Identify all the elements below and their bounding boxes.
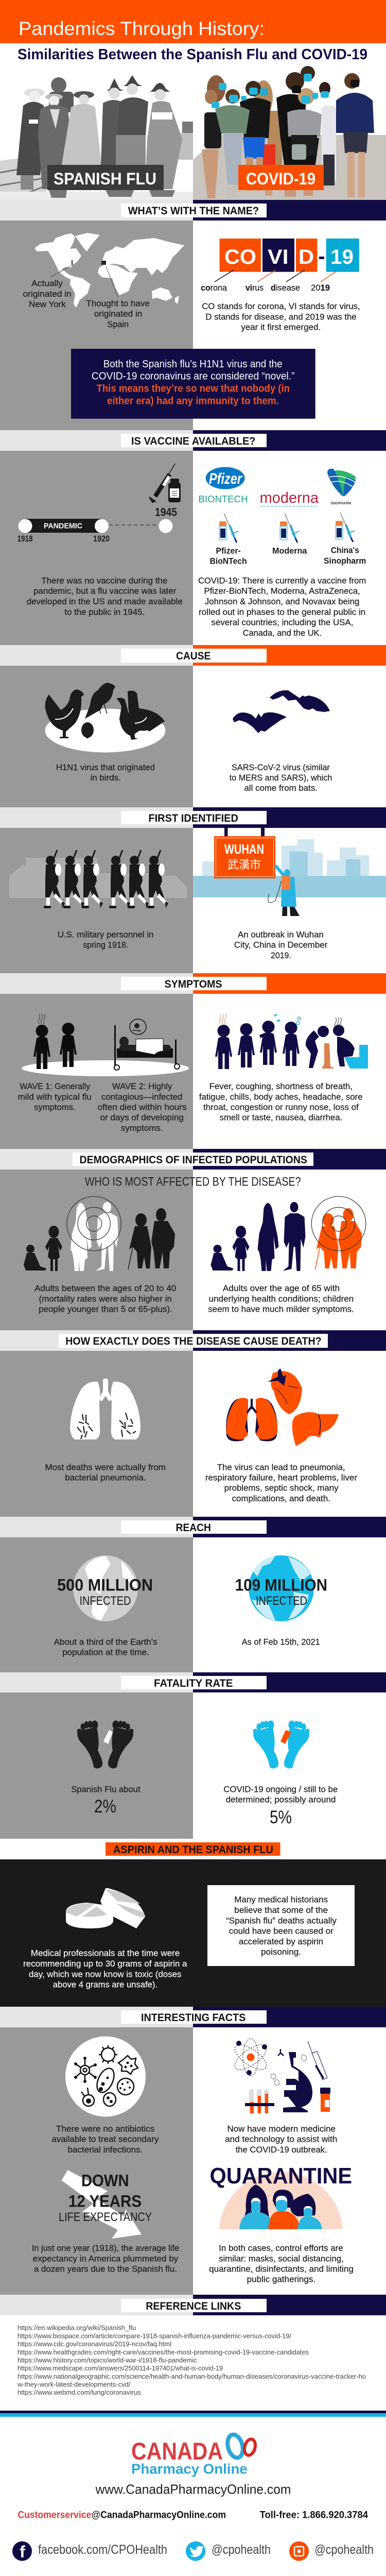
reference list xyxy=(17,2324,366,2396)
callout: aspirin poisoning: accelerated by aspirin xyxy=(239,1937,323,1946)
map captions: Actually xyxy=(31,279,63,289)
vaccine names xyxy=(210,545,366,566)
text: control efforts: quarantine, disinfectants, and limiting xyxy=(209,2264,354,2274)
text: current vaccines: Johnson & Johnson, and Novavax being xyxy=(205,597,359,606)
text: COVID symptoms: fatigue, chills, body aches, headache, sore xyxy=(199,1092,362,1101)
text: wave 2: WAVE 2: Highly xyxy=(112,1081,172,1091)
silhouettes: COVID age groups xyxy=(211,1196,366,1271)
social: facebook: f xyxy=(20,2543,25,2561)
text: Wuhan outbreak: 2019. xyxy=(271,951,291,960)
timeline: PANDEMIC xyxy=(44,522,82,531)
stat: 109 million infected xyxy=(235,1576,327,1608)
icon: vaccine vial Pfizer xyxy=(219,513,238,543)
callout: aspirin poisoning xyxy=(207,1885,355,1966)
text: current vaccines: Canada, and the UK. xyxy=(243,628,322,638)
title: Pandemics Through History: xyxy=(19,18,265,39)
icon: lungs, heart and liver xyxy=(226,1368,339,1446)
text: Wuhan outbreak: An outbreak in Wuhan xyxy=(238,929,324,939)
text: wave 1: WAVE 1: Generally xyxy=(20,1081,91,1091)
logo: Canada Pharmacy Online xyxy=(131,2433,257,2477)
contact email: Customerservice@CanadaPharmacyOnline.com xyxy=(17,2510,226,2520)
timeline: 1920 xyxy=(93,534,110,544)
text: medical professionals aspirin: above 4 grams are unsafe). xyxy=(53,1980,157,1990)
stat: 500 million infected: 500 MILLION xyxy=(57,1576,153,1595)
callout: aspirin poisoning: poisoning. xyxy=(261,1947,301,1957)
COVID acronym explanation xyxy=(202,301,360,332)
heading: How exactly xyxy=(0,1330,386,1351)
heading: Interesting facts xyxy=(0,2007,386,2027)
heading: Symptoms: SYMPTOMS xyxy=(165,978,222,990)
text: life expectancy: In just one year (1918), the average life xyxy=(32,2243,179,2253)
callout: novel viruses: either era) had any immunity to them. xyxy=(107,395,279,406)
heading: Cause: CAUSE xyxy=(176,650,210,662)
icon: lungs with bacteria xyxy=(70,1379,141,1439)
logo: Canada Pharmacy Online: CANADA xyxy=(131,2437,223,2465)
website: www.CanadaPharmacyOnline.com xyxy=(95,2482,291,2497)
sign: Wuhan: 武漢市 xyxy=(227,858,261,871)
text: H1N1 birds: in birds. xyxy=(91,773,121,783)
text: no vaccine during pandemic: There was no vaccine during the xyxy=(41,575,167,585)
vaccine names: Sinopharm xyxy=(324,556,366,566)
stat: down 12 years life expectancy xyxy=(59,2171,152,2224)
vaccine names: Pfizer- xyxy=(216,546,241,555)
COVID-19 letter blocks: CO xyxy=(224,246,256,268)
vaccine names: China's xyxy=(331,545,359,555)
text: control efforts: similar: masks, social distancing, xyxy=(219,2253,344,2263)
reference list: https://www.history.com/topics/world-war-i/1918-flu-pandemic xyxy=(17,2356,197,2364)
text: wave 1: symptoms. xyxy=(34,1102,76,1112)
social: instagram: @cpohealth xyxy=(314,2543,374,2557)
text: no vaccine during pandemic xyxy=(27,575,183,617)
logo: Sinopharm: SINOPHARM xyxy=(330,502,351,505)
text: no vaccine during pandemic: to the public in 1945. xyxy=(64,607,145,617)
text: bacterial pneumonia: Most deaths were actually from xyxy=(45,1462,166,1472)
map captions xyxy=(23,279,150,329)
logo: Pfizer BioNTech: BIONTECH xyxy=(199,494,248,504)
label: COVID-19: COVID-19 xyxy=(246,170,315,188)
timeline xyxy=(17,506,177,544)
text: US military: spring 1918. xyxy=(83,940,128,950)
text: current vaccines: rolled out in phases to the general public in xyxy=(199,607,365,617)
map captions: New York xyxy=(29,299,66,309)
text: third of the population xyxy=(54,1637,157,1657)
stat: 109 million infected: INFECTED xyxy=(256,1594,307,1608)
text: no antibiotics: There were no antibiotics xyxy=(56,2124,154,2133)
sign: Wuhan: WUHAN xyxy=(224,841,264,857)
social: facebook: facebook.com/CPOHealth xyxy=(38,2543,167,2557)
text: medical professionals aspirin: Medical professionals at the time were xyxy=(31,1948,180,1958)
panel: aspirin xyxy=(0,1859,386,2007)
map captions: originated in xyxy=(94,309,142,319)
heading: Reach: REACH xyxy=(176,1522,211,1534)
text: SARS-CoV-2 bats: all come from bats. xyxy=(244,783,318,793)
illustration: COVID symptoms figures xyxy=(215,1014,368,1069)
text: H1N1 birds: H1N1 virus that originated xyxy=(56,762,155,772)
text: COVID complications: The virus can lead to pneumonia, xyxy=(217,1462,345,1472)
text: 5 percent: COVID-19 ongoing / still to be xyxy=(223,1784,338,1794)
callout: novel viruses: COVID-19 coronavirus are considered “novel.” xyxy=(92,371,294,382)
world map xyxy=(34,233,184,308)
text: SARS-CoV-2 bats: to MERS and SARS), which xyxy=(230,773,332,783)
timeline: 1918 xyxy=(17,534,33,544)
illustration: town silhouette xyxy=(9,858,187,898)
heading: Fatality rate: FATALITY RATE xyxy=(154,1677,233,1689)
text: 2 percent: 2% xyxy=(94,1797,116,1817)
silhouettes: 1918 age groups xyxy=(24,1196,175,1271)
text: wave 1 xyxy=(17,1081,92,1112)
text: life expectancy: expectancy in America plummeted by xyxy=(33,2253,179,2263)
logo: Moderna: moderna xyxy=(260,489,319,506)
stat: down 12 years life expectancy: LIFE EXPECTANCY xyxy=(59,2210,152,2224)
icon: cyan globe xyxy=(249,1555,314,1621)
heading: What's with the name: WHAT’S WITH THE NAME? xyxy=(128,205,259,217)
text: 5 percent: determined; possibly around xyxy=(226,1795,336,1805)
map markers and leader lines xyxy=(50,260,118,298)
text: adults over 65: underlying health conditions; children xyxy=(209,1294,354,1303)
icon: downward arrow xyxy=(62,2170,142,2239)
text: life expectancy xyxy=(32,2243,179,2274)
text: no vaccine during pandemic: pandemic, but a flu vaccine was later xyxy=(33,586,177,596)
callout: aspirin poisoning: Many medical historians xyxy=(234,1895,328,1905)
text: control efforts: public gatherings. xyxy=(247,2275,315,2284)
illustration: marching soldiers xyxy=(44,850,168,908)
text: control efforts: In both cases, control efforts are xyxy=(219,2243,343,2253)
subtitle: Similarities Between the Spanish Flu and COVID-19 xyxy=(17,46,367,63)
text: 2 percent: Spanish Flu about xyxy=(71,1784,141,1794)
text: wave 2: or days of developing xyxy=(100,1113,184,1123)
text: wave 2 xyxy=(97,1081,186,1133)
text: SARS-CoV-2 bats: SARS-CoV-2 virus (similar xyxy=(232,762,330,772)
reference list: https://www.biospace.com/article/compare-1918-spanish-influenza-pandemic-versus-covid-19/ xyxy=(17,2332,291,2340)
text: 2 percent xyxy=(71,1784,141,1817)
heading: Aspirin: ASPIRIN AND THE SPANISH FLU xyxy=(113,1844,273,1856)
COVID acronym explanation: year it first emerged. xyxy=(241,323,321,332)
heading: Reach xyxy=(0,1517,386,1537)
sign: Wuhan xyxy=(214,828,275,878)
text: current vaccines: COVID-19: There is currently a vaccine from xyxy=(198,575,366,585)
icon: bats xyxy=(233,690,330,733)
acronym words xyxy=(201,283,330,293)
text: COVID complications: complications, and death. xyxy=(232,1494,330,1503)
acronym words: 2019 xyxy=(311,283,330,293)
social: facebook xyxy=(12,2541,167,2561)
icon: grey globe xyxy=(73,1555,138,1621)
map captions: Spain xyxy=(107,319,129,329)
vaccine names: Moderna xyxy=(272,546,307,555)
text: modern medicine: the COVID-19 outbreak. xyxy=(236,2145,327,2155)
text: third of the population: About a third of the Earth’s xyxy=(54,1637,157,1647)
icon: feet with toe tag xyxy=(77,1721,134,1769)
timeline: 1945 xyxy=(155,506,177,519)
stat: down 12 years life expectancy: DOWN xyxy=(81,2171,129,2190)
acronym words: corona xyxy=(201,283,227,293)
logo: Pfizer BioNTech: Pfizer xyxy=(209,470,243,487)
heading: Is vaccine available: IS VACCINE AVAILABLE? xyxy=(131,435,255,447)
text: wave 2: often died within hours xyxy=(97,1102,186,1112)
acronym words: virus xyxy=(245,283,264,293)
reference list: w-they-work-latest-developments-cvd/ xyxy=(17,2380,131,2388)
text: adults 20 to 40: (mortality rates were also higher in xyxy=(39,1294,172,1303)
text: wave 1: mild with typical flu xyxy=(17,1092,92,1101)
heading: First identified: FIRST IDENTIFIED xyxy=(148,812,238,824)
contact phone: Toll-free: 1.866.920.3784 xyxy=(260,2510,368,2520)
stat: 500 million infected: INFECTED xyxy=(79,1594,131,1608)
label: Spanish flu: SPANISH FLU xyxy=(54,170,156,188)
stat: 109 million infected: 109 MILLION xyxy=(235,1576,327,1595)
text: COVID symptoms: throat, congestion or runny nose, loss of xyxy=(203,1102,359,1112)
logo: Pfizer BioNTech xyxy=(199,467,248,504)
text: 5 percent xyxy=(223,1784,338,1827)
COVID-19 letter blocks xyxy=(215,239,359,282)
heading: Is vaccine available xyxy=(0,430,386,451)
social: twitter: @cpohealth xyxy=(212,2543,271,2557)
text: COVID symptoms: Fever, coughing, shortness of breath, xyxy=(209,1081,353,1091)
text: as of date: As of Feb 15th, 2021 xyxy=(242,1637,320,1647)
hero: Spanish flu photo group xyxy=(0,75,193,200)
text: adults over 65 xyxy=(208,1283,354,1314)
text: medical professionals aspirin xyxy=(23,1948,187,1990)
text: adults 20 to 40: Adults between the ages of 20 to 40 xyxy=(34,1283,176,1293)
reference list: https://www.cdc.gov/coronavirus/2019-ncov/faq.html xyxy=(17,2340,171,2348)
icon: aspirin pills xyxy=(66,1888,145,1928)
heading: Demographics xyxy=(0,1149,386,1170)
callout: novel viruses: This means they’re so new that nobody (in xyxy=(97,383,290,395)
COVID acronym explanation: D stands for disease, and 2019 was the xyxy=(205,312,357,321)
COVID-19 letter blocks: VI xyxy=(268,246,288,268)
text: COVID complications: problems, septic shock, many xyxy=(224,1483,339,1493)
text: adults 20 to 40: people younger than 5 or 65-plus). xyxy=(39,1304,172,1314)
text: no antibiotics: bacterial infections. xyxy=(68,2145,143,2155)
text: bacterial pneumonia: bacterial pneumonia. xyxy=(65,1472,146,1482)
text: wave 2: contagious—infected xyxy=(101,1092,182,1101)
heading: How exactly: HOW EXACTLY DOES THE DISEASE CAUSE DEATH? xyxy=(65,1335,322,1347)
reference list: https://www.nationalgeographic.com/science/health-and-human-body/human-diseases/coronavirus-vaccine-tracker-ho xyxy=(17,2372,366,2380)
callout: aspirin poisoning: believe that some of the xyxy=(234,1905,328,1915)
heading word: quarantine: QUARANTINE xyxy=(210,2163,352,2189)
icon: microbes circle xyxy=(65,2036,146,2116)
text: modern medicine: and technology to assist with xyxy=(225,2134,337,2144)
social: instagram xyxy=(289,2541,374,2561)
heading: Interesting facts: INTERESTING FACTS xyxy=(141,2012,245,2024)
text: adults 20 to 40 xyxy=(34,1283,176,1314)
text: Wuhan outbreak xyxy=(234,929,328,960)
vaccine names: BioNTech xyxy=(210,556,247,566)
text: H1N1 birds xyxy=(56,762,155,783)
reference list: https://www.medscape.com/answers/2500114-197401/what-is-covid-19 xyxy=(17,2364,223,2372)
map captions: originated in xyxy=(23,289,72,299)
acronym words: disease xyxy=(271,283,300,293)
text: current vaccines xyxy=(198,575,366,638)
text: modern medicine xyxy=(225,2124,337,2155)
heading: What's with the name xyxy=(0,200,386,221)
callout: novel viruses: Both the Spanish flu’s H1N1 virus and the xyxy=(103,359,283,370)
COVID-19 letter blocks: 19 xyxy=(330,246,354,268)
label: Spanish flu xyxy=(47,165,164,190)
heading: Demographics: DEMOGRAPHICS OF INFECTED POPULATIONS xyxy=(79,1154,307,1166)
COVID-19 letter blocks: D xyxy=(299,246,314,268)
footer divider bars xyxy=(0,2411,386,2417)
heading: Reference links: REFERENCE LINKS xyxy=(146,2300,241,2312)
text: 5 percent: 5% xyxy=(270,1807,292,1827)
text: medical professionals aspirin: day, which we now know is toxic (doses xyxy=(29,1969,181,1979)
icon: vaccine vial Sinopharm xyxy=(336,513,355,542)
map captions: Thought to have xyxy=(86,298,150,308)
reference list: https://www.webmd.com/lung/coronavirus xyxy=(17,2388,141,2396)
heading: Symptoms xyxy=(0,973,386,994)
text: US military: U.S. military personnel in xyxy=(58,929,153,939)
text: no antibiotics xyxy=(51,2124,159,2155)
icon: birds xyxy=(45,683,166,752)
icon: syringe and vial xyxy=(149,464,181,502)
callout: aspirin poisoning: could have been caused or xyxy=(229,1926,334,1936)
illustration: Wuhan skyline xyxy=(193,839,386,897)
reference list: https://en.wikipedia.org/wiki/Spanish_flu xyxy=(17,2324,136,2332)
illustration: flu symptoms wave figures xyxy=(22,1014,189,1076)
logo: Canada Pharmacy Online: Pharmacy Online xyxy=(131,2461,248,2477)
section backgrounds: split panels xyxy=(0,221,193,2295)
text: SARS-CoV-2 bats xyxy=(230,762,332,793)
social: twitter xyxy=(186,2541,271,2561)
text: COVID complications: respiratory failure, heart problems, liver xyxy=(205,1472,357,1482)
text: control efforts xyxy=(209,2243,354,2284)
stat: down 12 years life expectancy: 12 YEARS xyxy=(68,2192,142,2210)
heading: First identified xyxy=(0,807,386,828)
text: medical professionals aspirin: recommending up to 30 grams of aspirin a xyxy=(23,1959,187,1969)
text: modern medicine: Now have modern medicine xyxy=(227,2124,336,2133)
text: COVID complications xyxy=(205,1462,357,1503)
hero: COVID-19 crowd xyxy=(193,66,386,200)
label: COVID-19 xyxy=(238,165,324,190)
illustration: masked family xyxy=(219,2172,343,2229)
reference list: https://www.healthgrades.com/right-care/vaccines/the-most-promising-covid-19-vaccine-candidates xyxy=(17,2348,309,2356)
callout: aspirin poisoning: “Spanish flu” deaths actually xyxy=(226,1916,337,1925)
icon: cyan feet with toe tag xyxy=(253,1721,310,1769)
heading: Cause xyxy=(0,645,386,666)
text: current vaccines: Pfizer-BioNTech, Moderna, AstraZeneca, xyxy=(204,586,360,596)
text: COVID symptoms: smell or taste, nausea, diarrhea. xyxy=(220,1113,342,1123)
icon: hazmat worker xyxy=(268,866,300,916)
text: Wuhan outbreak: City, China in December xyxy=(234,940,328,950)
text: US military xyxy=(58,929,153,950)
text: adults over 65: seem to have much milder symptoms. xyxy=(208,1304,354,1314)
heading: Fatality rate xyxy=(0,1672,386,1692)
illustration: lab science xyxy=(231,2039,330,2113)
text: current vaccines: several countries, including the USA, xyxy=(211,618,353,628)
COVID acronym explanation: CO stands for corona, VI stands for virus, xyxy=(202,301,360,311)
text: bacterial pneumonia xyxy=(45,1462,166,1482)
text: third of the population: population at the time. xyxy=(62,1647,149,1657)
text: adults over 65: Adults over the age of 65 with xyxy=(223,1283,340,1293)
text: wave 2: symptoms. xyxy=(121,1123,163,1133)
text: COVID symptoms xyxy=(199,1081,362,1123)
text: no antibiotics: available to treat secondary xyxy=(51,2134,159,2144)
logo: Sinopharm xyxy=(327,469,356,505)
subheading: who is most affected: WHO IS MOST AFFECTED BY THE DISEASE? xyxy=(85,1175,301,1189)
stat: 500 million infected xyxy=(57,1576,153,1608)
icon: vaccine vial Moderna xyxy=(280,513,299,543)
callout: novel viruses xyxy=(71,349,315,419)
header band xyxy=(0,0,386,43)
text: no vaccine during pandemic: developed in the US and made available xyxy=(27,597,183,606)
text: life expectancy: a dozen years due to the Spanish flu. xyxy=(34,2264,177,2274)
heading: Reference links xyxy=(0,2295,386,2315)
